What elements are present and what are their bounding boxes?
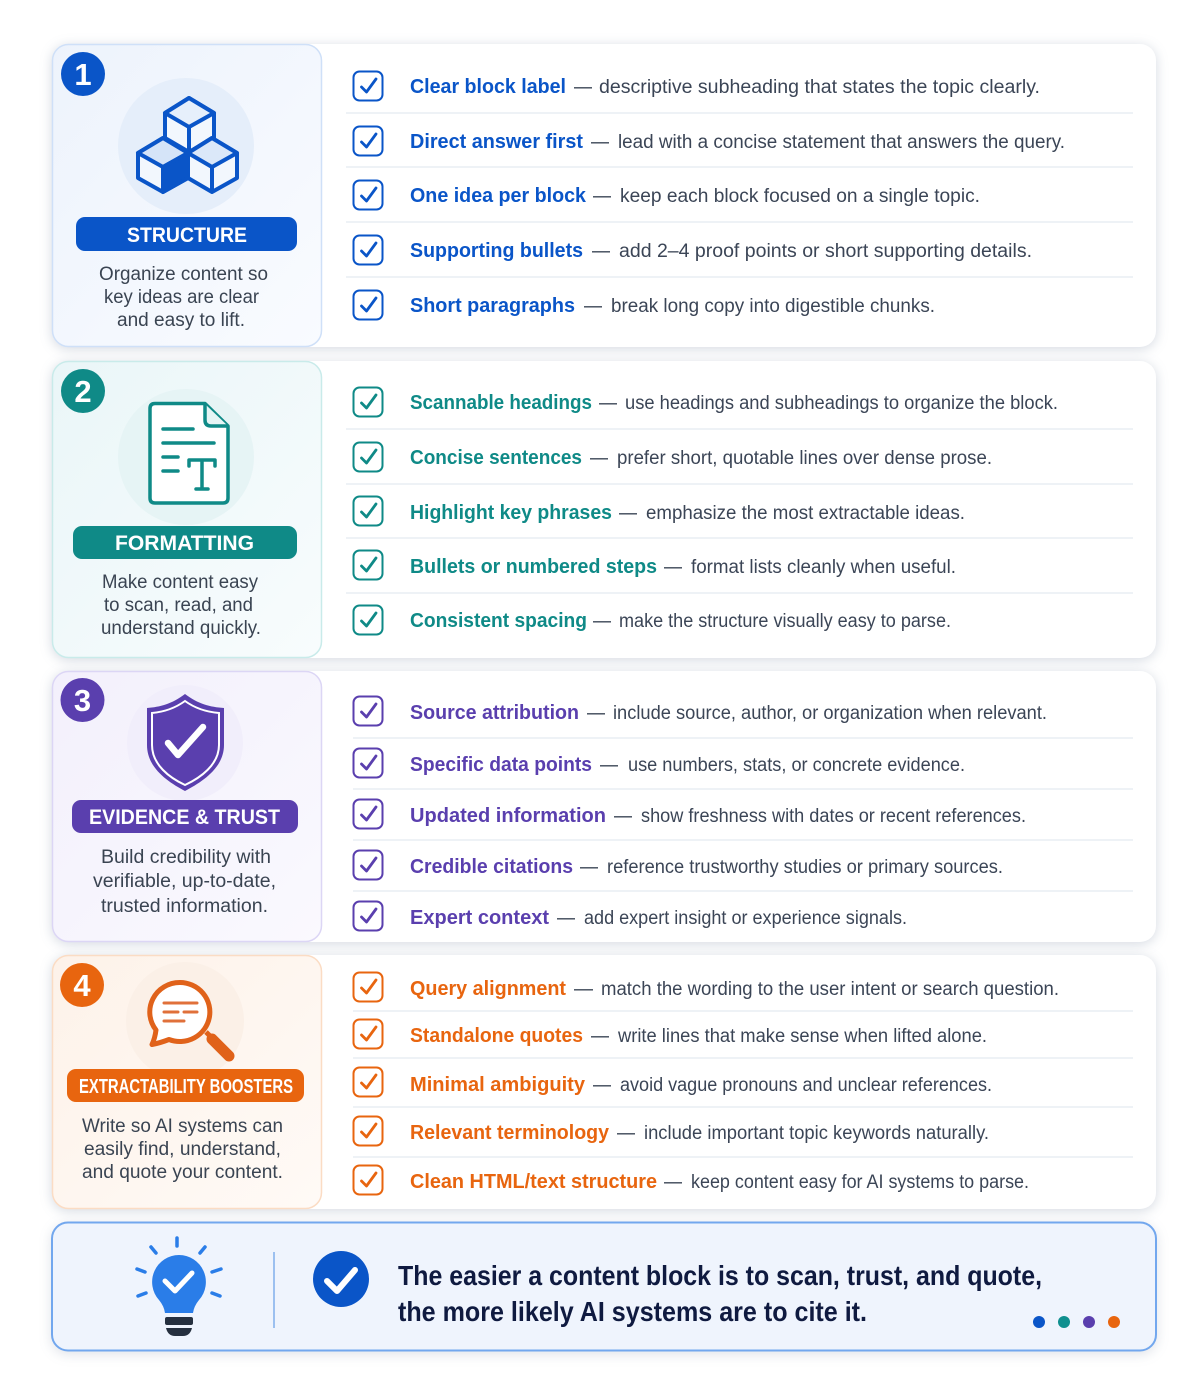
checklist item: —: [599, 392, 617, 414]
checklist item: —: [557, 907, 575, 929]
checklist item: Relevant terminology: [410, 1122, 610, 1144]
category pill: structure: STRUCTURE: [127, 224, 247, 247]
checklist item: break long copy into digestible chunks.: [611, 296, 935, 317]
checklist item: [354, 1116, 989, 1146]
checklist item: keep each block focused on a single topic.: [620, 186, 980, 207]
checklist item: make the structure visually easy to parse.: [619, 611, 951, 632]
checklist item: [354, 972, 1059, 1002]
checklist item: Specific data points: [410, 754, 592, 776]
checklist item: Standalone quotes: [410, 1025, 583, 1047]
description: structure: Organize content so: [99, 264, 268, 285]
description: evidence and trust: [93, 847, 276, 917]
category pill: extractability boosters: [67, 1069, 304, 1102]
checklist item: —: [592, 240, 610, 262]
description: evidence and trust: Build credibility with: [101, 847, 271, 868]
checklist item: [354, 696, 1047, 726]
colour dots: [1033, 1316, 1120, 1328]
checklist item: [354, 902, 907, 930]
checklist item: Minimal ambiguity: [410, 1074, 586, 1096]
checklist item: Expert context: [410, 907, 549, 929]
panel: extractability boosters: [52, 955, 1156, 1209]
checklist item: add 2–4 proof points or short supporting details.: [619, 241, 1032, 262]
description: extractability boosters: easily find, understand,: [84, 1139, 281, 1160]
checklist item: Updated information: [410, 805, 606, 827]
checklist item: [354, 126, 1065, 156]
checklist item: One idea per block: [410, 185, 587, 207]
checklist item: —: [590, 447, 608, 469]
checklist item: reference trustworthy studies or primary sources.: [607, 857, 1003, 878]
description: evidence and trust: verifiable, up-to-date,: [93, 871, 276, 892]
description: formatting: to scan, read, and: [104, 595, 253, 616]
checklist item: —: [580, 856, 598, 878]
checklist item: —: [593, 610, 611, 632]
checklist item: [354, 550, 956, 580]
checklist item: Bullets or numbered steps: [410, 556, 657, 578]
icon: document: [118, 389, 254, 525]
number badge 3: [60, 678, 104, 722]
checklist item: include source, author, or organization when relevant.: [613, 703, 1047, 724]
description: structure: key ideas are clear: [104, 287, 260, 308]
checklist item: show freshness with dates or recent references.: [641, 806, 1026, 827]
panel: structure: [52, 44, 1156, 347]
checklist item: [354, 496, 965, 526]
number badge 2: 2: [74, 374, 92, 409]
checklist item: Query alignment: [410, 978, 566, 1000]
category pill: evidence and trust: [72, 800, 298, 833]
panel: formatting: [52, 361, 1156, 658]
checklist item: Clean HTML/text structure: [410, 1171, 657, 1193]
checklist item: —: [591, 1025, 609, 1047]
description: formatting: [101, 572, 261, 639]
number badge 1: [61, 52, 105, 96]
takeaway text: the more likely AI systems are to cite it.: [398, 1296, 867, 1327]
checklist item: [354, 800, 1026, 828]
checklist item: Highlight key phrases: [410, 502, 612, 524]
checklist item: use numbers, stats, or concrete evidence.: [628, 755, 965, 776]
checklist item: —: [614, 805, 632, 827]
checklist item: Short paragraphs: [410, 295, 575, 317]
description: formatting: Make content easy: [102, 572, 258, 593]
checklist item: Scannable headings: [410, 392, 592, 414]
checklist item: Supporting bullets: [410, 240, 583, 262]
checklist item: —: [619, 502, 637, 524]
checklist item: [354, 290, 935, 320]
checklist item: use headings and subheadings to organize the block.: [625, 393, 1058, 414]
checklist item: [354, 180, 980, 210]
checklist item: [354, 1020, 987, 1048]
checklist item: [354, 748, 965, 778]
checklist item: emphasize the most extractable ideas.: [646, 503, 965, 524]
checklist item: Source attribution: [410, 702, 579, 724]
category pill: formatting: FORMATTING: [115, 532, 254, 555]
checklist item: [354, 850, 1003, 880]
checklist item: match the wording to the user intent or search question.: [601, 979, 1059, 1000]
category pill: formatting: [73, 526, 297, 559]
checklist item: —: [664, 1171, 682, 1193]
checklist item: Direct answer first: [410, 131, 583, 153]
description: evidence and trust: trusted information.: [101, 896, 268, 917]
checklist item: descriptive subheading that states the topic clearly.: [599, 77, 1040, 98]
category pill: structure: [76, 217, 297, 251]
icon: shield with check: [127, 685, 243, 801]
checklist item: add expert insight or experience signals.: [584, 908, 907, 929]
checklist item: —: [574, 76, 592, 98]
icon: stacked cubes: [118, 78, 254, 214]
number badge 4: 4: [73, 968, 91, 1003]
checklist item: lead with a concise statement that answers the query.: [618, 132, 1065, 153]
icon: magnifier with speech bubble: [126, 962, 244, 1080]
checklist item: [354, 442, 992, 472]
icon: check circle: [313, 1251, 369, 1307]
panel: evidence and trust: [52, 671, 1156, 942]
description: formatting: understand quickly.: [101, 618, 261, 639]
category pill: extractability boosters: EXTRACTABILITY BOOSTERS: [79, 1076, 293, 1098]
checklist item: —: [617, 1122, 635, 1144]
checklist item: —: [591, 131, 609, 153]
description: extractability boosters: Write so AI systems can: [82, 1116, 283, 1137]
callout: key takeaway: [52, 1222, 1156, 1350]
checklist item: —: [574, 978, 593, 1000]
takeaway text: [398, 1260, 1042, 1327]
checklist item: Consistent spacing: [410, 610, 587, 632]
checklist item: keep content easy for AI systems to parse.: [691, 1172, 1029, 1193]
checklist item: —: [664, 556, 682, 578]
description: extractability boosters: and quote your content.: [82, 1162, 283, 1183]
checklist item: write lines that make sense when lifted alone.: [617, 1026, 987, 1047]
checklist item: [354, 606, 951, 634]
checklist item: —: [593, 185, 611, 207]
takeaway text: The easier a content block is to scan, trust, and quote,: [398, 1260, 1042, 1291]
description: extractability boosters: [82, 1116, 283, 1183]
number badge 3: 3: [74, 683, 91, 718]
description: structure: and easy to lift.: [117, 310, 245, 331]
checklist item: include important topic keywords naturally.: [644, 1123, 989, 1144]
checklist item: —: [587, 702, 605, 724]
checklist item: avoid vague pronouns and unclear references.: [620, 1075, 992, 1096]
checklist item: format lists cleanly when useful.: [691, 557, 956, 578]
checklist item: Clear block label: [410, 76, 566, 98]
icon: light bulb: [137, 1238, 221, 1336]
number badge 1: 1: [74, 57, 92, 92]
checklist item: [354, 1166, 1029, 1194]
checklist item: —: [584, 295, 602, 317]
checklist item: —: [593, 1074, 611, 1096]
number badge 4: [60, 963, 104, 1007]
checklist item: Concise sentences: [410, 447, 582, 469]
checklist item: Credible citations: [410, 856, 573, 878]
checklist item: —: [600, 754, 618, 776]
checklist item: [354, 1068, 992, 1096]
checklist item: [354, 72, 1040, 100]
number badge 2: [61, 369, 105, 413]
checklist item: [354, 388, 1058, 416]
category pill: evidence and trust: EVIDENCE & TRUST: [89, 806, 280, 829]
checklist item: [354, 236, 1032, 264]
checklist item: prefer short, quotable lines over dense prose.: [617, 448, 992, 469]
description: structure: [99, 264, 268, 331]
